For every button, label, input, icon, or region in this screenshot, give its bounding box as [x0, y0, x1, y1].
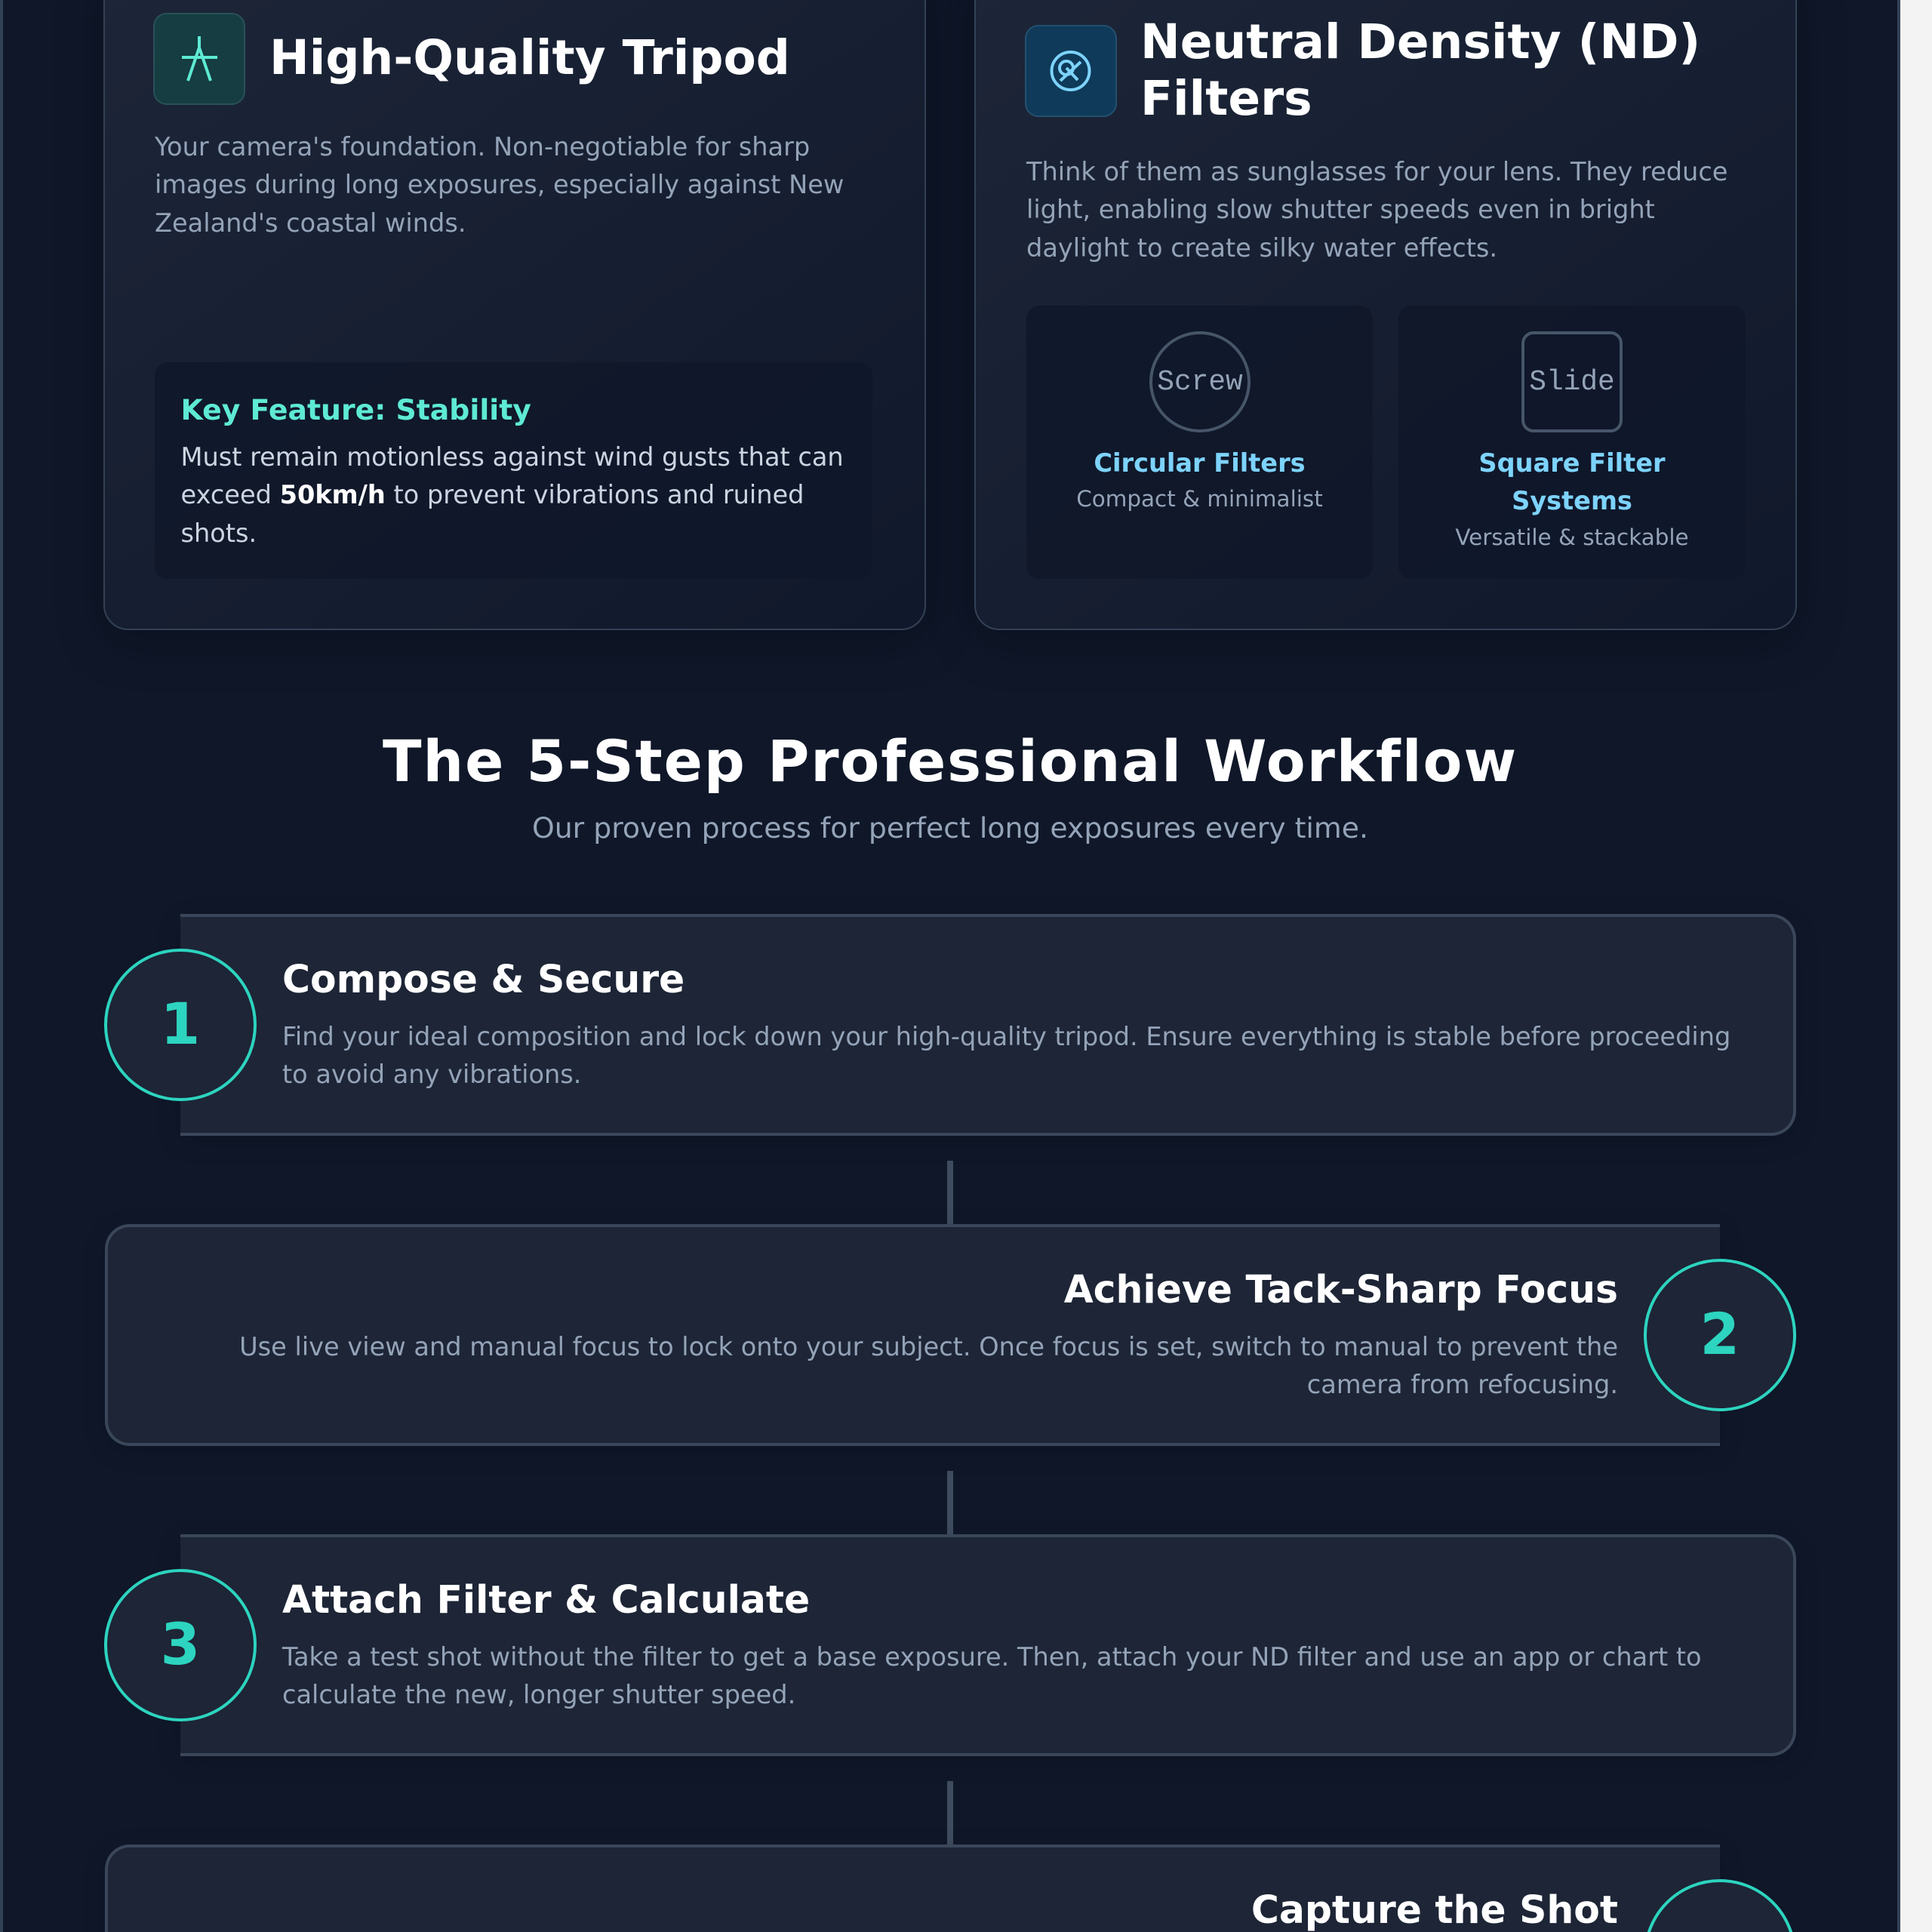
connector 2 to 3	[947, 1471, 953, 1534]
text: ND description: Think of them as sunglasses for your lens. They reduce	[1026, 157, 1727, 186]
text: key feature description: exceed 50km/h to prevent vibrations and ruined	[181, 480, 804, 509]
step 3 description: calculate the new, longer shutter speed.	[282, 1680, 795, 1709]
step 2 number: 2	[1700, 1301, 1740, 1367]
heading: Neutral Density Filters	[1140, 14, 1700, 126]
panel: key feature box	[155, 362, 872, 579]
step 1 card	[180, 914, 1796, 1136]
icon: ND filter	[1025, 25, 1117, 117]
heading: High-Quality Tripod: High-Quality Tripod	[269, 30, 790, 85]
text: tripod description	[155, 132, 844, 238]
step 3 card	[180, 1534, 1796, 1756]
step 4 card	[104, 1844, 1720, 1932]
step 2 description: Use live view and manual focus to lock onto your subject. Once focus is set, switch to manual to prevent the	[239, 1332, 1618, 1361]
icon: square slide filter: Slide	[1529, 367, 1615, 398]
label: square filter systems: Systems	[1512, 486, 1632, 515]
step 2 number	[1644, 1259, 1796, 1411]
section title: The 5-Step Professional Workflow	[383, 728, 1518, 794]
section subtitle: Our proven process for perfect long exposures every time.	[532, 811, 1368, 844]
label: square filter systems: Square Filter	[1478, 448, 1666, 478]
text: ND description: daylight to create silky water effects.	[1026, 233, 1497, 263]
panel: tripod card	[103, 0, 926, 630]
text: ND description: light, enabling slow shutter speeds even in bright	[1026, 195, 1655, 224]
step 3 title: Attach Filter & Calculate	[282, 1577, 810, 1622]
icon: circular screw filter: Screw	[1157, 367, 1243, 398]
text: tripod description: Zealand's coastal winds.	[155, 208, 466, 238]
panel: ND filters card	[974, 0, 1797, 630]
text: ND description	[1026, 157, 1727, 263]
text: key feature description: shots.	[181, 518, 257, 548]
label: circular filters: Circular Filters	[1094, 448, 1306, 478]
text: key feature description	[181, 442, 844, 548]
text: key feature description: Must remain motionless against wind gusts that can	[181, 442, 844, 472]
step 1 description: to avoid any vibrations.	[282, 1060, 581, 1089]
step 1 title: Compose & Secure	[282, 957, 685, 1001]
icon: square slide filter	[1521, 331, 1623, 432]
heading: Neutral Density Filters: Filters	[1140, 71, 1312, 126]
step 3 description	[282, 1642, 1702, 1709]
label: square filter systems	[1478, 448, 1666, 515]
heading: Neutral Density Filters: Neutral Density (ND)	[1140, 14, 1700, 69]
step 1 description: Find your ideal composition and lock down your high-quality tripod. Ensure everything is stable before proceeding	[282, 1022, 1730, 1051]
text: tripod description: Your camera's foundation. Non-negotiable for sharp	[155, 132, 810, 162]
step 2 title: Achieve Tack-Sharp Focus	[1064, 1267, 1618, 1312]
step 3 number: 3	[161, 1611, 200, 1678]
step 1 number	[104, 949, 257, 1101]
panel: square filters	[1398, 306, 1746, 579]
step 3 description: Take a test shot without the filter to get a base exposure. Then, attach your ND filter and use an app or chart to	[282, 1642, 1702, 1672]
connector 1 to 2	[947, 1161, 953, 1224]
icon: circular screw filter	[1149, 331, 1251, 432]
caption: circular filters: Compact & minimalist	[1076, 486, 1323, 512]
step 2 description: camera from refocusing.	[1307, 1370, 1618, 1399]
connector 3 to 4	[947, 1781, 953, 1844]
step 2 card	[104, 1224, 1720, 1446]
step 4 title: Capture the Shot	[1251, 1887, 1618, 1932]
panel: circular filters	[1026, 306, 1373, 579]
step 2 description	[239, 1332, 1618, 1399]
caption: square filter systems: Versatile & stackable	[1455, 524, 1689, 549]
step 4 number	[1644, 1879, 1796, 1932]
step 1 number: 1	[161, 991, 200, 1057]
text: tripod description: images during long exposures, especially against New	[155, 170, 844, 199]
icon: tripod	[153, 13, 245, 105]
step 1 description	[282, 1022, 1730, 1089]
heading: key feature: Key Feature: Stability	[181, 393, 531, 426]
step 3 number	[104, 1569, 257, 1721]
